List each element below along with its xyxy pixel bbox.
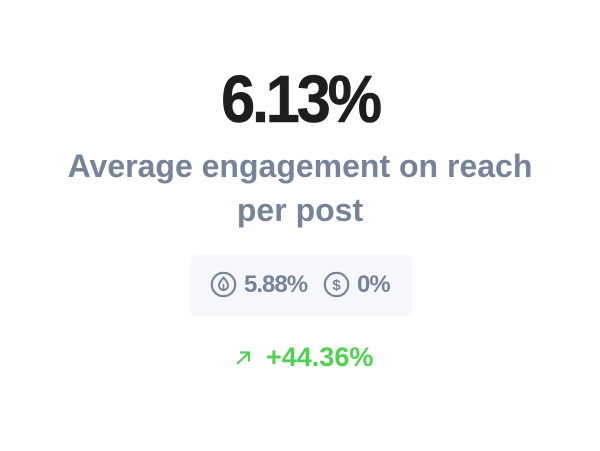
metric description [68,148,532,228]
metric description: Average engagement on reach [68,148,532,184]
icon: organic leaf [210,272,236,298]
change value: +44.36% [266,342,373,372]
icon: paid dollar [324,272,350,298]
icon: up arrow [236,351,250,365]
panel: breakdown [190,255,412,316]
icon: paid dollar: $ [332,277,341,294]
organic value: 5.88% [244,271,307,298]
metric description: per post [237,192,363,228]
headline value: 6.13% [221,62,379,137]
paid value: 0% [357,271,390,298]
